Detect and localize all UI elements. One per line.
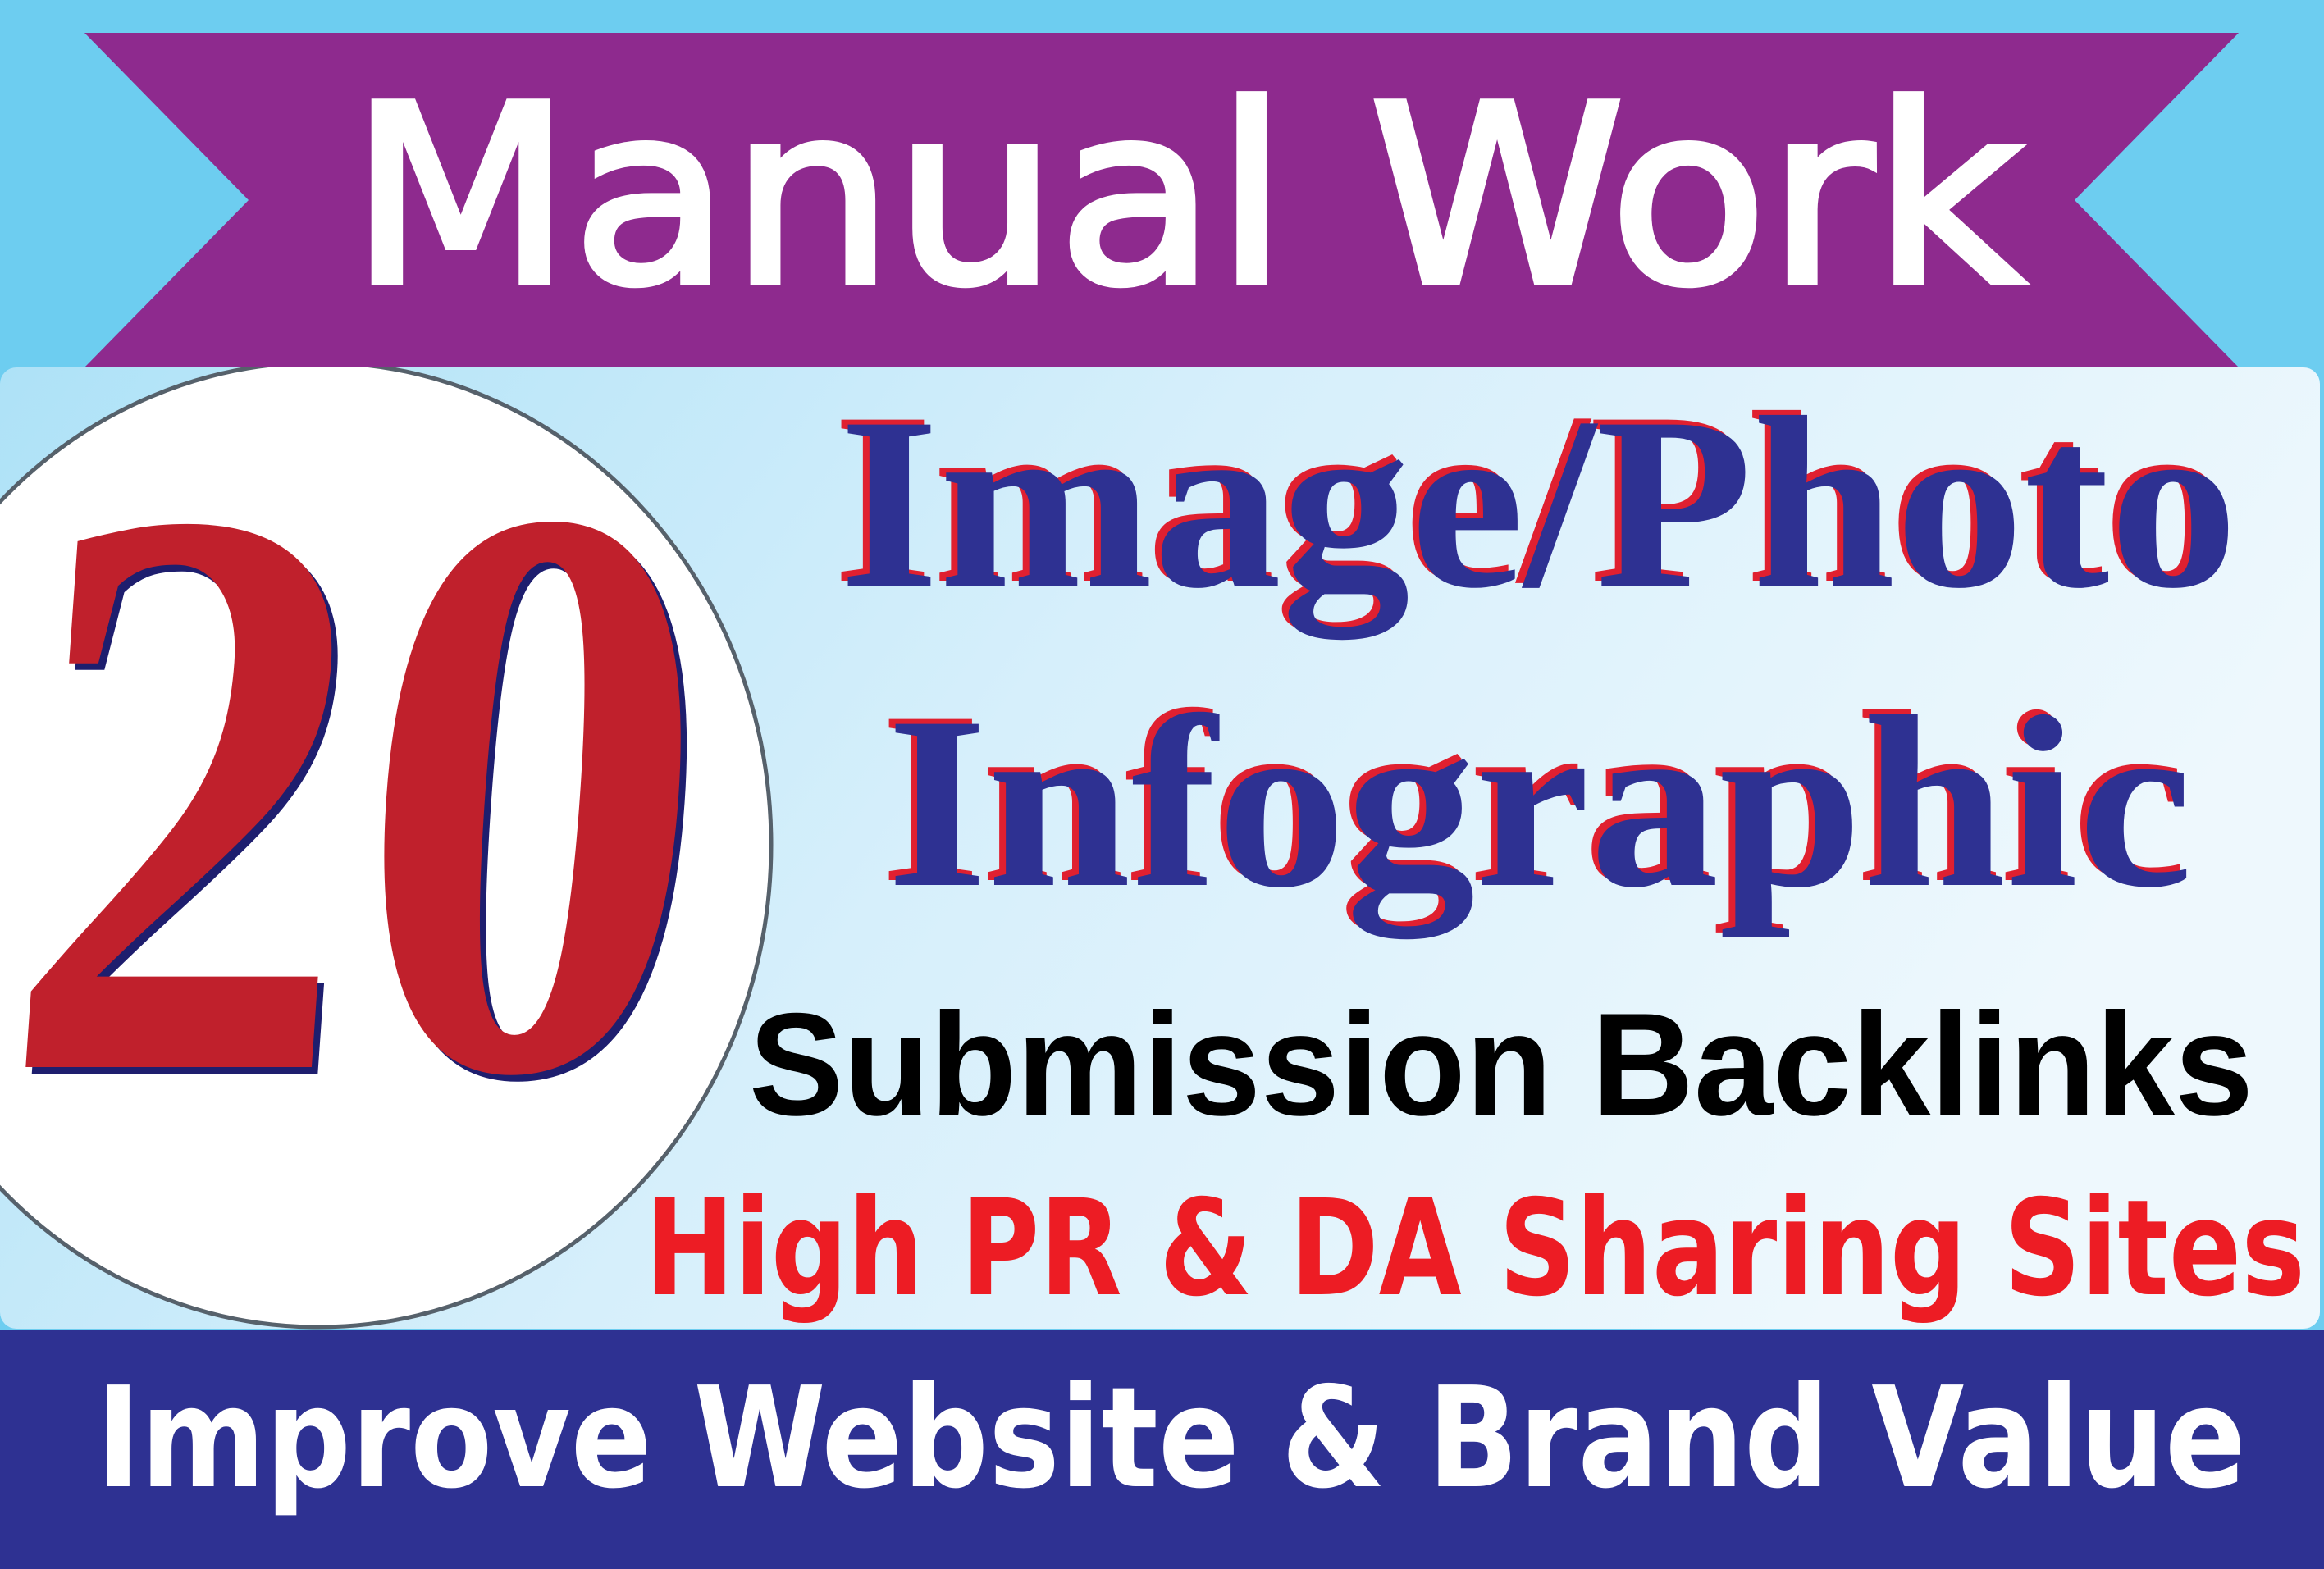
white circle <box>0 363 771 1327</box>
big number 20: 20 <box>0 336 737 1245</box>
heading: Image/Photo: Image/Photo <box>839 367 2238 643</box>
light panel <box>0 367 2320 1329</box>
title: Manual Work: Manual Work <box>349 53 2023 340</box>
heading: Image/Photo: Image/Photo <box>833 362 2231 638</box>
heading: Infographic: Infographic <box>887 666 2193 942</box>
bottom band <box>0 1330 2324 1569</box>
purple ribbon banner <box>84 33 2239 367</box>
big number 20: 20 <box>0 343 743 1252</box>
heading: Infographic: Infographic <box>880 661 2186 937</box>
subheading: Submission Backlinks: Submission Backlinks <box>749 983 2253 1146</box>
